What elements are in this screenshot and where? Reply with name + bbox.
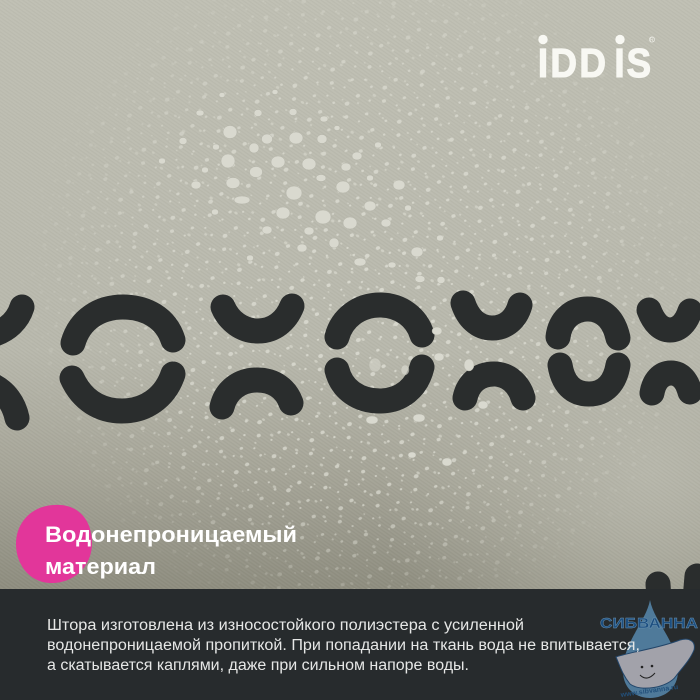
logo: IDDIS: IDDIS — [538, 41, 651, 86]
watermark: Sibvanna: www.sibvanna.ru — [619, 684, 679, 699]
pink blob behind heading — [16, 505, 92, 583]
printed pattern of black arcs — [0, 303, 697, 600]
arc group: second O — [337, 305, 422, 401]
watermark: Sibvanna: СИБВАННА — [600, 615, 698, 632]
arc group: third O — [558, 309, 618, 394]
dark description panel — [0, 589, 700, 700]
description text — [47, 617, 640, 674]
heading — [45, 522, 297, 579]
water droplets over print — [369, 327, 488, 409]
heading: Водонепроницаемый — [45, 522, 297, 547]
arc group: left edge partial X — [0, 307, 22, 418]
water droplets — [58, 0, 670, 589]
arc group: second X — [463, 303, 523, 398]
arc group: first O — [72, 307, 173, 411]
description text: водонепроницаемой пропиткой. При попадании на ткань вода не впитывается, — [47, 637, 640, 654]
watermark: Sibvanna — [600, 600, 698, 699]
arc group: third X — [649, 310, 690, 393]
description text: Штора изготовлена из износостойкого полиэстера с усиленной — [47, 617, 524, 634]
arc group: first X — [222, 306, 292, 407]
heading: материал — [45, 554, 156, 579]
description text: а скатывается каплями, даже при сильном напоре воды. — [47, 657, 469, 674]
arc group: bottom edge partials — [658, 576, 697, 600]
logo: IDDIS: R — [650, 38, 654, 44]
